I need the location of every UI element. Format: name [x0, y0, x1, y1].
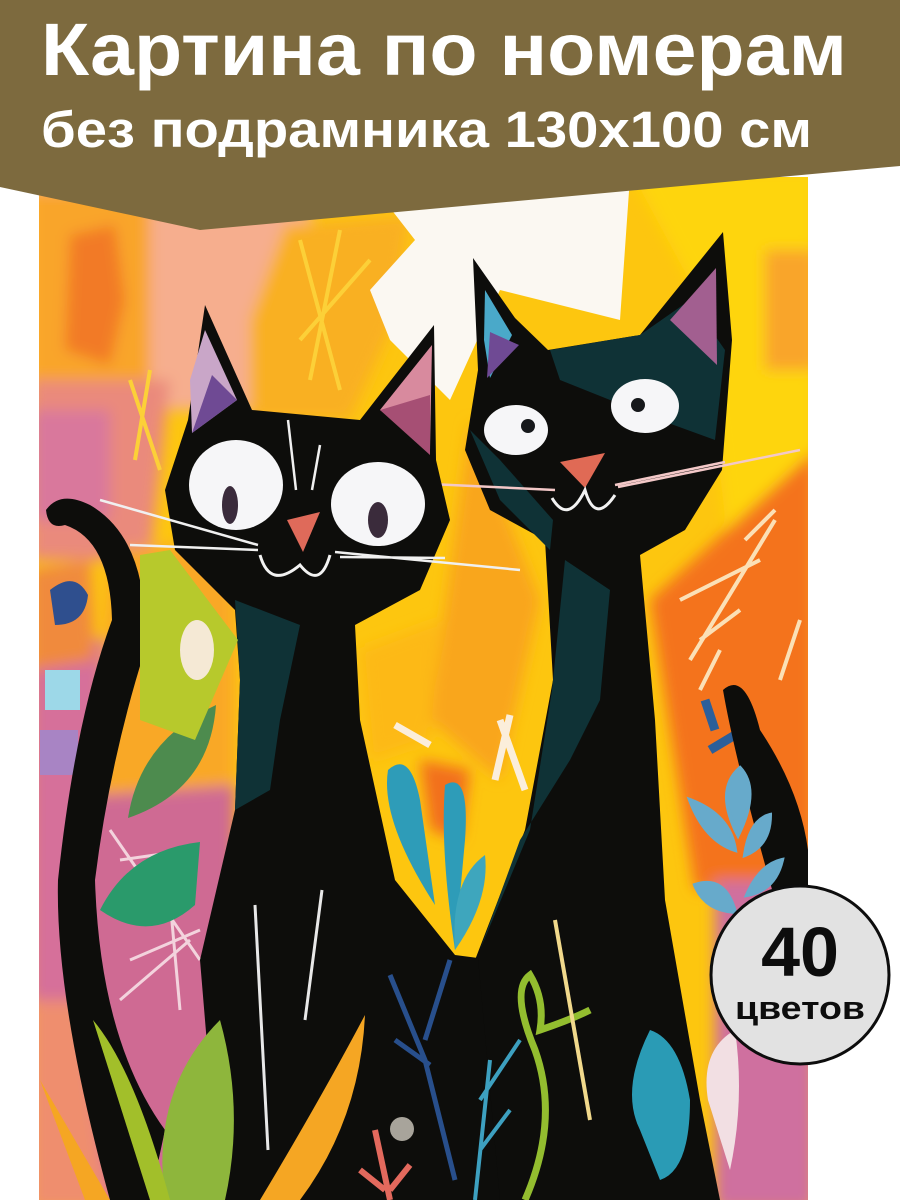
- painting background: [30, 170, 815, 1200]
- badge: 40 colours: [711, 886, 889, 1064]
- decorative leaves and flowers: [40, 550, 782, 1200]
- painting: two black cats: [30, 170, 815, 1200]
- banner title: Картина по номерам: [41, 8, 847, 91]
- cat on the right: [430, 232, 808, 1200]
- badge: 40 colours: 40: [761, 913, 839, 991]
- brush strokes: [130, 230, 370, 470]
- badge: 40 colours: цветов: [735, 990, 865, 1026]
- banner subtitle: без подрамника 130х100 см: [41, 101, 812, 158]
- left cat tail: [46, 499, 165, 1200]
- cat on the left: [100, 305, 520, 1200]
- banner: [0, 0, 900, 230]
